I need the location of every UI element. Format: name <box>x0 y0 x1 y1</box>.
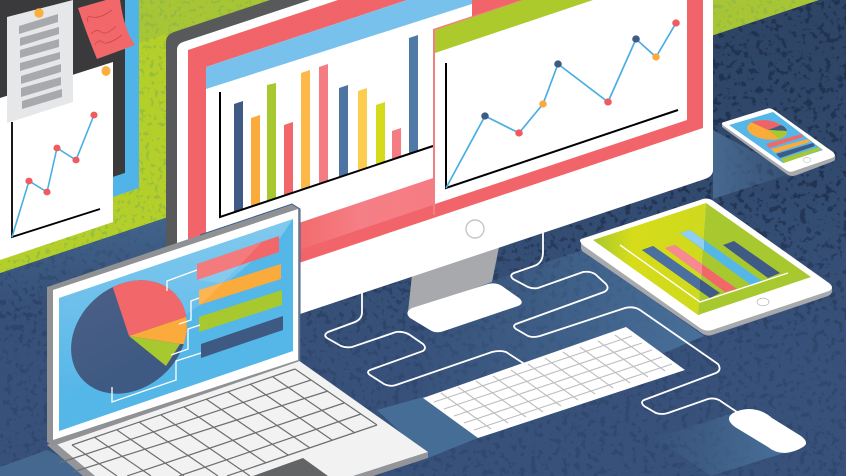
legend bars <box>197 236 279 280</box>
tablet bar chart <box>620 230 788 302</box>
laptop screen <box>59 219 293 431</box>
pink strip <box>290 178 433 253</box>
icon: orange pin <box>34 8 44 18</box>
screen reflection <box>59 219 293 400</box>
bar chart <box>220 35 433 217</box>
phone bars <box>766 134 803 148</box>
text lines <box>19 14 62 109</box>
laptop keyboard <box>59 369 377 476</box>
cables <box>325 233 740 414</box>
red screen frame <box>188 0 703 300</box>
axes <box>12 122 100 237</box>
back wall <box>0 0 846 280</box>
monitor stand <box>408 247 499 312</box>
green header <box>435 0 593 53</box>
phone screen <box>729 112 823 163</box>
phone <box>722 108 835 176</box>
gray document <box>7 0 73 123</box>
monitor <box>166 0 713 360</box>
tablet home button <box>757 298 769 306</box>
panel: bar chart window <box>206 0 472 254</box>
tablet screen <box>593 203 706 315</box>
panel: line chart window <box>433 0 687 215</box>
phone home button <box>803 158 811 162</box>
keyboard grid <box>434 335 672 430</box>
laptop lid <box>47 204 300 446</box>
leader lines <box>112 270 201 402</box>
laptop <box>47 204 428 476</box>
monitor body <box>177 0 713 360</box>
axes <box>220 92 433 217</box>
tablet <box>580 198 832 336</box>
phone edge <box>722 123 835 176</box>
laptop base edge <box>47 441 428 476</box>
axes <box>446 63 678 188</box>
desktop keyboard <box>423 327 685 438</box>
phone pie chart <box>746 118 788 142</box>
trend line <box>12 115 94 237</box>
phone body <box>722 108 835 172</box>
laptop bezel <box>53 209 298 440</box>
tablet edge <box>581 241 832 336</box>
icon: orange pin <box>102 66 110 76</box>
tablet body <box>580 198 832 331</box>
blue header <box>206 0 472 89</box>
pin board <box>0 0 139 215</box>
data points <box>481 19 680 137</box>
trend line <box>446 23 676 188</box>
laptop base <box>53 360 428 476</box>
floor light strips <box>0 130 793 476</box>
icon: power button <box>466 220 484 238</box>
trackpad <box>253 458 328 476</box>
paper: line chart <box>0 62 113 260</box>
monitor base <box>407 283 522 332</box>
pie chart <box>71 280 187 394</box>
sticky note <box>78 0 135 59</box>
scribbles <box>88 10 122 45</box>
monitor bezel <box>166 0 320 300</box>
icon: mouse <box>729 409 806 453</box>
data points <box>25 112 98 195</box>
